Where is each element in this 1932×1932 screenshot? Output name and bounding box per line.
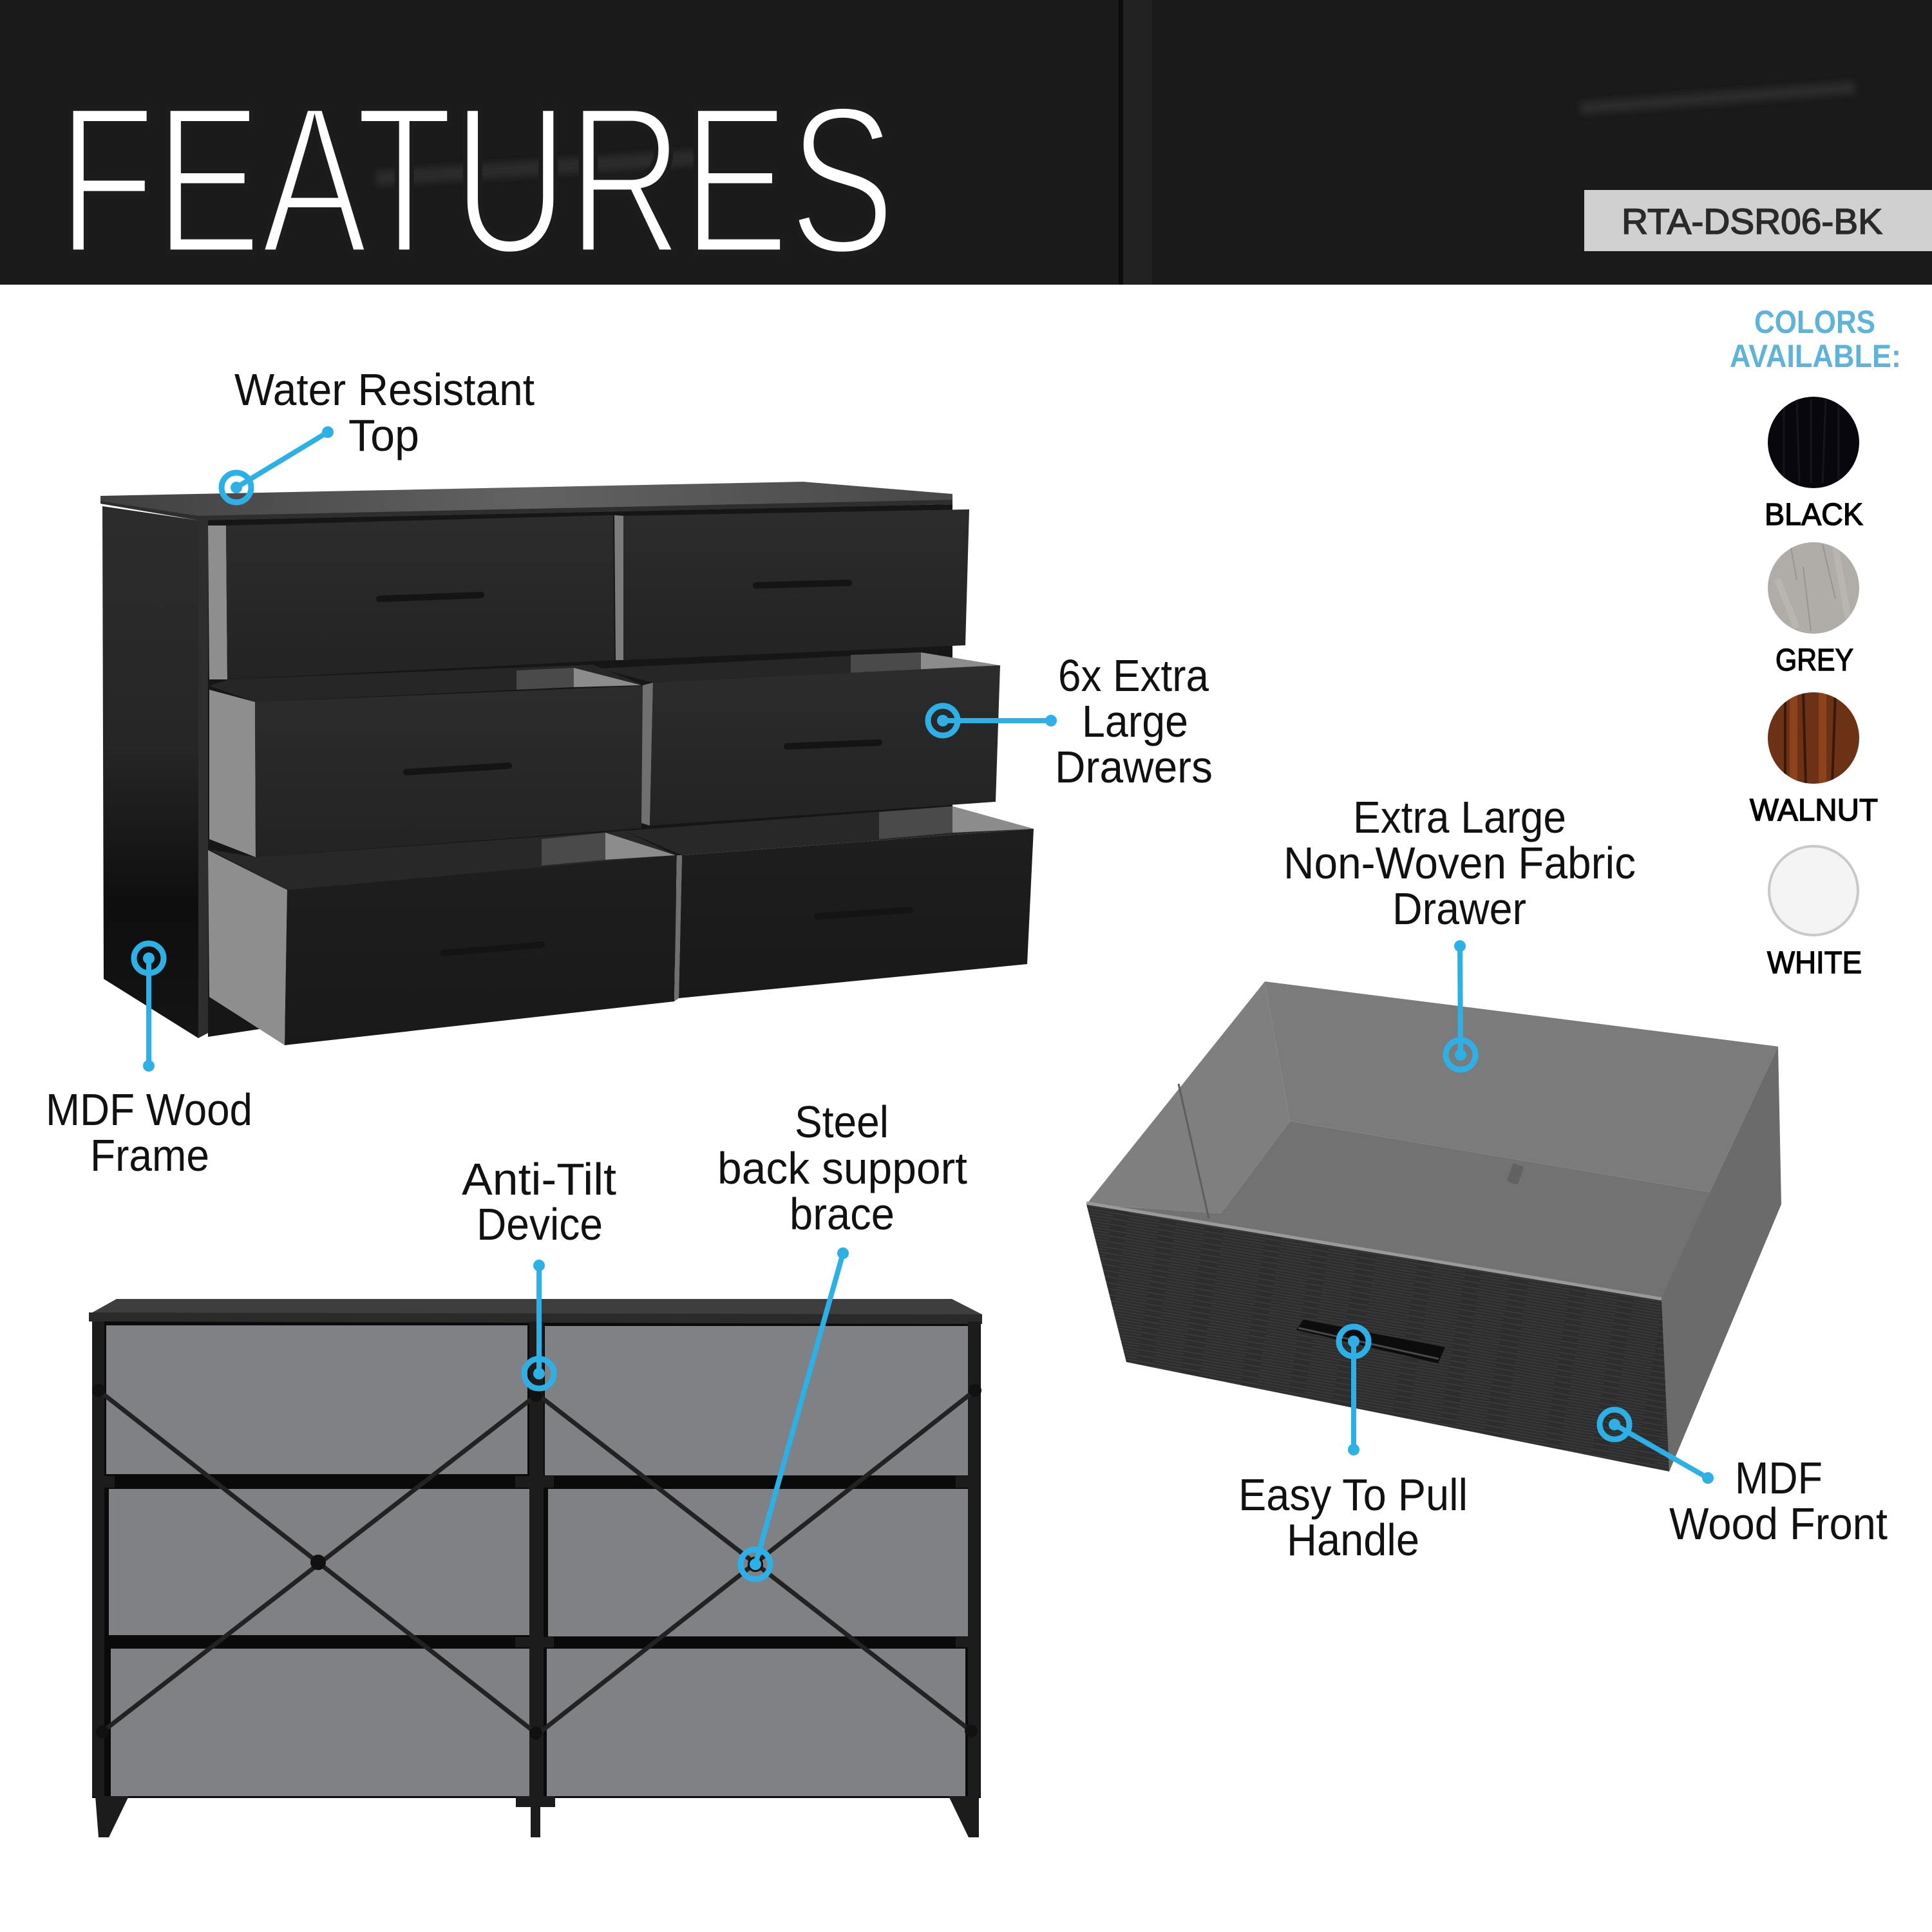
callout: anti-tilt device: Anti-Tilt	[462, 1154, 616, 1204]
drawer back wall	[1265, 981, 1778, 1192]
callout: extra large non-woven fabric drawer: Drawer	[1392, 884, 1526, 934]
callout: 6x extra large drawers	[928, 650, 1213, 792]
fabric drawer backs	[106, 1325, 969, 1796]
callout: steel back support brace: Steel	[795, 1097, 889, 1147]
colors available heading: AVAILABLE:	[1730, 338, 1901, 374]
callout: anti-tilt device: Device	[477, 1199, 603, 1249]
callout: extra large non-woven fabric drawer: Non-Woven Fabric	[1283, 838, 1636, 888]
label: walnut: WALNUT	[1750, 793, 1878, 828]
drawer left wall	[1086, 981, 1290, 1218]
colors available heading: COLORS	[1754, 304, 1875, 340]
product: single fabric drawer	[1086, 981, 1781, 1472]
drawer floor	[1086, 1121, 1710, 1300]
callout: steel back support brace	[717, 1097, 967, 1579]
model number tag: RTA-DSR06-BK	[1622, 201, 1882, 242]
model number tag	[1584, 190, 1932, 251]
callout: 6x extra large drawers: Drawers	[1055, 742, 1213, 792]
drawer: middle left	[209, 665, 643, 857]
dresser side panel	[102, 506, 198, 1038]
label: grey: GREY	[1776, 643, 1853, 677]
callout: mdf wood front: Wood Front	[1669, 1499, 1888, 1549]
callout: steel back support brace: back support	[717, 1143, 967, 1193]
back top board	[89, 1299, 982, 1324]
callout: steel back support brace: brace	[790, 1189, 895, 1239]
title: FEATURES	[58, 63, 895, 298]
callout: mdf wood front: MDF	[1735, 1453, 1823, 1503]
callout: mdf wood frame	[46, 943, 252, 1180]
callout: water resistant top	[222, 365, 535, 502]
label: white: WHITE	[1767, 946, 1862, 980]
callout: easy to pull handle: Handle	[1287, 1515, 1419, 1565]
swatch: grey	[1768, 542, 1859, 634]
dresser top	[100, 482, 952, 520]
callout: water resistant top: Water Resistant	[234, 365, 535, 415]
callout: mdf wood frame: Frame	[90, 1130, 209, 1180]
callout: 6x extra large drawers: 6x Extra	[1058, 650, 1209, 701]
cross braces	[92, 1384, 981, 1739]
black backing	[92, 1321, 981, 1798]
carcass backing	[198, 504, 952, 1037]
callout: anti-tilt device	[462, 1154, 616, 1388]
drawer: bottom right	[625, 806, 1034, 1001]
callout: mdf wood front	[1600, 1410, 1888, 1549]
drawer front	[1086, 1204, 1669, 1472]
frame posts and legs	[92, 1321, 980, 1837]
callout: extra large non-woven fabric drawer	[1283, 792, 1636, 1070]
drawer: top right	[614, 509, 969, 660]
swatch: white	[1769, 846, 1858, 935]
inner tab	[1506, 1163, 1524, 1185]
colors available heading	[1730, 304, 1901, 374]
front frame strip	[198, 519, 208, 1038]
product: dresser back view	[89, 1299, 982, 1837]
product: dresser with open drawers	[100, 482, 1034, 1045]
drawer: bottom left	[208, 831, 677, 1045]
callout: easy to pull handle	[1238, 1327, 1468, 1565]
callout: water resistant top: Top	[348, 410, 419, 460]
swatch: walnut	[1768, 692, 1859, 784]
label: black: BLACK	[1765, 498, 1863, 532]
drawer: top left	[208, 515, 614, 679]
swatch: black	[1768, 397, 1859, 488]
header banner	[0, 0, 1932, 285]
drawer right side	[1660, 1046, 1781, 1472]
drawer: middle right	[599, 652, 1000, 826]
callout: extra large non-woven fabric drawer: Extra Large	[1353, 792, 1566, 842]
callout: 6x extra large drawers: Large	[1082, 696, 1188, 746]
callout: mdf wood frame: MDF Wood	[46, 1084, 252, 1135]
drawer handle	[1296, 1320, 1445, 1363]
callout: easy to pull handle: Easy To Pull	[1238, 1470, 1468, 1520]
